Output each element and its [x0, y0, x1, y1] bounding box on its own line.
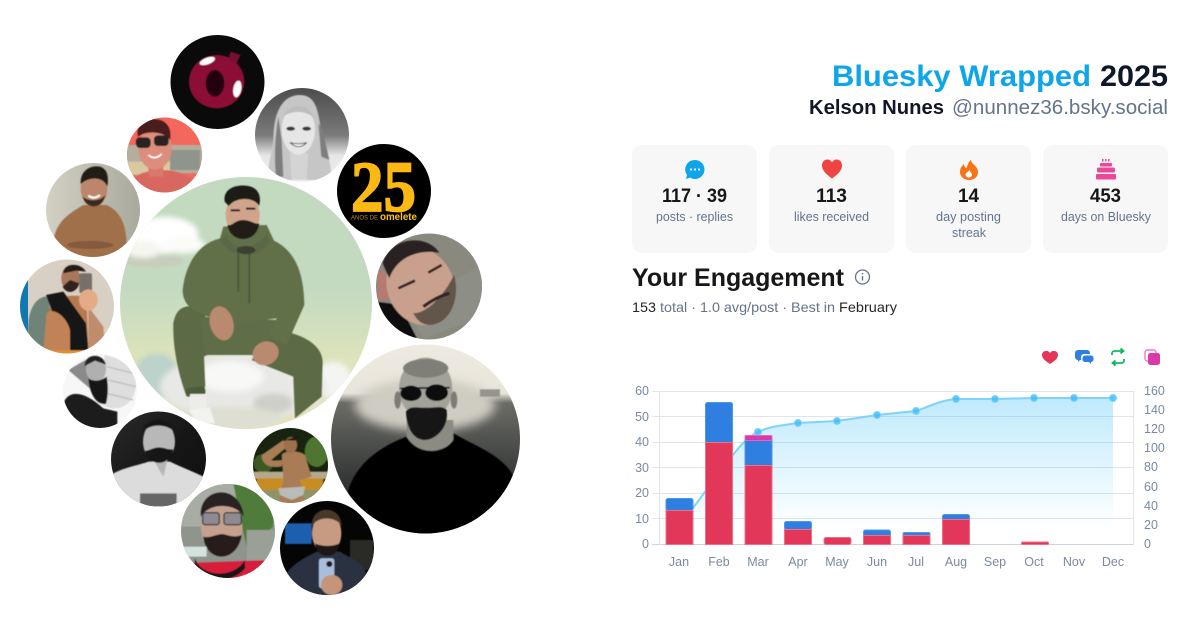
stat card: posts and replies: 117 · 39 — [662, 186, 727, 207]
icon: heart — [822, 160, 842, 178]
month labels: Feb — [708, 555, 730, 569]
icon: reposts arrows — [1112, 348, 1124, 366]
cumulative line with points — [679, 394, 1116, 527]
left axis labels — [635, 384, 649, 551]
chart: monthly engagement with cumulative line — [635, 384, 1165, 569]
engagement summary: February — [839, 299, 897, 315]
left axis labels: 10 — [635, 512, 649, 526]
avatar: main profile, man in green tracksuit on a cloud — [120, 177, 372, 430]
title: Bluesky Wrapped 2025: 2025 — [1100, 60, 1168, 93]
avatar: man with black sunglasses and black t-shirt — [331, 344, 521, 540]
left axis labels: 50 — [635, 410, 649, 424]
avatar: man taking mirror selfie with phone — [280, 501, 374, 597]
left axis labels: 40 — [635, 435, 649, 449]
user name and handle: @nunnez36.bsky.social — [952, 97, 1168, 119]
icon: speech bubble — [685, 160, 704, 179]
month labels: Nov — [1063, 555, 1086, 569]
icon: birthday cake — [1096, 159, 1116, 180]
engagement summary: 153 — [632, 299, 656, 315]
right axis labels: 160 — [1144, 384, 1165, 398]
avatar: 25 anos de omelete logo: 25 — [351, 147, 416, 227]
month labels: Aug — [945, 555, 967, 569]
stat card: days on Bluesky: days on Bluesky — [1061, 209, 1151, 224]
icon: likes heart — [1042, 351, 1058, 364]
user name and handle: Kelson Nunes — [809, 97, 944, 119]
avatar: bearded man in white t-shirt, black and white — [111, 411, 206, 510]
avatar: bearded man with white paper fan collar — [63, 354, 137, 430]
icon: info — [856, 270, 870, 284]
title: Bluesky Wrapped 2025: Bluesky Wrapped — [832, 60, 1091, 93]
icon: flame — [960, 160, 978, 180]
stat card: likes received — [769, 145, 894, 253]
avatar: man in grey swimwear by a river — [250, 428, 330, 505]
month labels: Mar — [747, 555, 769, 569]
avatar: man with glasses and headphones, red shirt — [180, 483, 277, 583]
stat card: likes received: 113 — [816, 186, 847, 207]
chart gridlines — [652, 391, 1134, 545]
engagement summary: total · 1.0 avg/post · Best in — [660, 299, 835, 315]
month labels — [669, 555, 1124, 569]
right axis labels: 120 — [1144, 422, 1165, 436]
stat card: days on Bluesky — [1043, 145, 1168, 253]
left axis labels: 60 — [635, 384, 649, 398]
month labels: Apr — [788, 555, 808, 569]
avatar: 25 anos de omelete logo — [337, 144, 431, 238]
month labels: Jan — [669, 555, 689, 569]
avatar: 25 anos de omelete logo: ANOS DE — [351, 214, 379, 222]
stat card: day posting streak: 14 — [958, 186, 979, 207]
right axis labels: 20 — [1144, 518, 1158, 532]
avatar: shirtless smiling man — [46, 163, 140, 263]
avatar: 25 anos de omelete logo: omelete — [380, 211, 417, 223]
right axis labels: 140 — [1144, 403, 1165, 417]
left axis labels: 20 — [635, 486, 649, 500]
cumulative area — [679, 398, 1113, 544]
stat card: day posting streak: day posting — [936, 209, 1001, 224]
stacked bars — [666, 402, 1048, 544]
stat card: day posting streak — [906, 145, 1031, 253]
user name and handle — [809, 97, 1168, 119]
month labels: Jun — [867, 555, 887, 569]
icon: quotes squares — [1145, 350, 1160, 365]
avatar: blonde woman portrait — [255, 88, 349, 182]
avatar: mirror selfie man with tattoos — [20, 259, 114, 356]
avatar: man with sunglasses on red background — [127, 118, 202, 192]
month labels: May — [825, 555, 850, 569]
month labels: Jul — [908, 555, 924, 569]
icon: replies bubbles — [1075, 350, 1094, 364]
stat card: day posting streak: streak — [952, 225, 986, 240]
right axis labels — [1144, 384, 1165, 551]
left axis labels: 0 — [642, 537, 649, 551]
avatar: bearded man resting head on hand — [375, 233, 483, 340]
avatar: pomegranate — [170, 35, 265, 129]
stat card: days on Bluesky: 453 — [1090, 186, 1121, 207]
left axis labels: 30 — [635, 461, 649, 475]
stat card: posts and replies: posts · replies — [656, 209, 733, 224]
right axis labels: 40 — [1144, 499, 1158, 513]
month labels: Sep — [984, 555, 1006, 569]
right axis labels: 80 — [1144, 460, 1158, 474]
right axis labels: 0 — [1144, 537, 1151, 551]
right axis labels: 100 — [1144, 441, 1165, 455]
chart legend icons — [1042, 348, 1160, 366]
heading: Your Engagement: Your Engagement — [632, 264, 845, 292]
engagement summary — [632, 299, 897, 315]
month labels: Dec — [1102, 555, 1124, 569]
stat card: likes received: likes received — [794, 209, 869, 224]
month labels: Oct — [1024, 555, 1044, 569]
stat card: posts and replies — [632, 145, 757, 253]
right axis labels: 60 — [1144, 480, 1158, 494]
